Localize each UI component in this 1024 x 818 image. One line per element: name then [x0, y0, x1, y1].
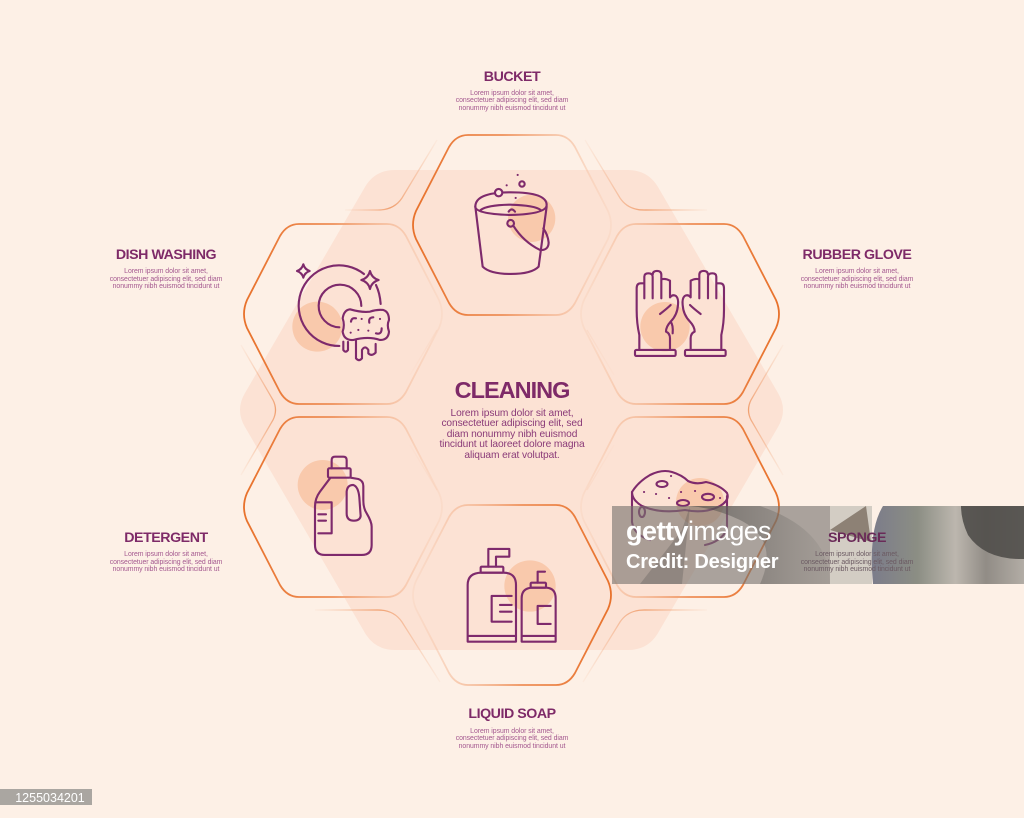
icon: rubber gloves [635, 271, 726, 356]
large background hexagon [240, 170, 783, 650]
label: sponge: consectetuer adipiscing elit, sed diam [801, 559, 914, 566]
label: sponge [801, 530, 914, 573]
label: bucket: nonummy nibh euismod tincidunt ut [459, 105, 566, 112]
label: rubber glove: RUBBER GLOVE [803, 247, 911, 263]
label: bucket: Lorem ipsum dolor sit amet, [470, 90, 554, 97]
icon: sponge [632, 471, 728, 545]
label: liquid soap [456, 706, 569, 750]
label: dish washing: Lorem ipsum dolor sit amet, [124, 268, 208, 275]
label: rubber glove [801, 247, 914, 290]
label: rubber glove: Lorem ipsum dolor sit amet, [815, 268, 899, 275]
label: dish washing: DISH WASHING [116, 247, 217, 263]
hexagon: liquid soap [413, 505, 611, 685]
hexagon: rubber glove [581, 224, 779, 404]
label: rubber glove: consectetuer adipiscing elit, sed diam [801, 276, 914, 283]
hexagon: bucket [413, 135, 611, 315]
label: sponge: nonummy nibh euismod tincidunt ut [804, 566, 911, 573]
label: rubber glove: nonummy nibh euismod tincidunt ut [804, 283, 911, 290]
label: sponge: SPONGE [828, 530, 886, 546]
connecting hexagon fragments [241, 140, 783, 682]
icon: dish and sponge [292, 264, 389, 360]
label: sponge: Lorem ipsum dolor sit amet, [815, 551, 899, 558]
label: detergent: DETERGENT [124, 530, 209, 546]
label: dish washing: consectetuer adipiscing elit, sed diam [110, 276, 223, 283]
watermark text: gettyimages [626, 516, 771, 546]
watermark band [612, 506, 1024, 584]
watermark text: Credit: Designer [626, 551, 779, 573]
hexagon: sponge [581, 417, 779, 597]
label: bucket: BUCKET [484, 69, 541, 85]
hexagon: dish washing [244, 224, 442, 404]
label: liquid soap: LIQUID SOAP [468, 706, 556, 722]
label: liquid soap: Lorem ipsum dolor sit amet, [470, 728, 554, 735]
label: dish washing: nonummy nibh euismod tincidunt ut [113, 283, 220, 290]
label: dish washing [110, 247, 223, 290]
image id tag: 1255034201 [15, 791, 85, 805]
watermark text [626, 516, 779, 573]
icon: liquid soap bottles [468, 549, 556, 642]
hexagon: detergent [244, 417, 442, 597]
label: detergent: consectetuer adipiscing elit, sed diam [110, 559, 223, 566]
label: liquid soap: consectetuer adipiscing elit, sed diam [456, 735, 569, 742]
label: detergent: nonummy nibh euismod tincidunt ut [113, 566, 220, 573]
label: detergent: Lorem ipsum dolor sit amet, [124, 551, 208, 558]
center paragraph: tincidunt ut laoreet dolore magna [439, 439, 585, 450]
center paragraph: diam nonummy nibh euismod [447, 429, 578, 440]
center paragraph: Lorem ipsum dolor sit amet, [450, 408, 574, 419]
label: bucket: consectetuer adipiscing elit, sed diam [456, 97, 569, 104]
center paragraph: consectetuer adipiscing elit, sed [441, 418, 583, 429]
title: cleaning: CLEANING [455, 377, 569, 403]
image id tag [0, 789, 92, 805]
label: liquid soap: nonummy nibh euismod tincidunt ut [459, 743, 566, 750]
label: detergent [110, 530, 223, 573]
center paragraph [439, 408, 585, 461]
label: bucket [456, 69, 569, 112]
center paragraph: aliquam erat volutpat. [464, 450, 560, 461]
icon: bucket [475, 175, 555, 274]
icon: detergent bottle [298, 457, 372, 555]
